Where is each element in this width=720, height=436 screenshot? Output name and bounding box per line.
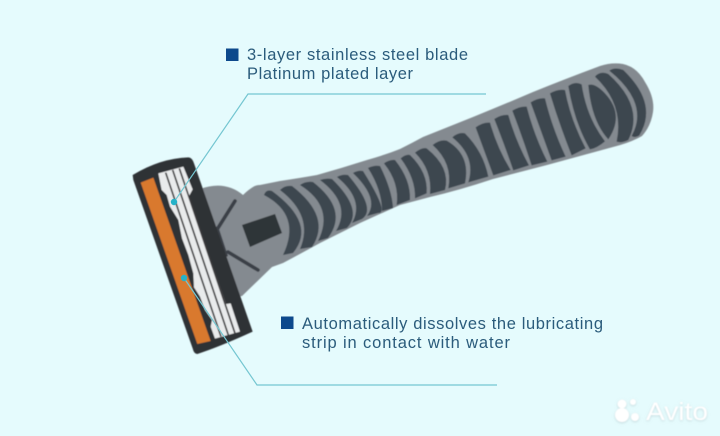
pivot struts and slot [206,201,282,270]
razor handle [200,63,653,300]
leader dot: blade [171,199,177,205]
leader dot: strip [181,275,187,281]
razor illustration [133,63,653,354]
blade description: Platinum plated layer [247,65,414,83]
watermark: Avito: Avito [646,398,708,426]
watermark: Avito [615,398,708,426]
bullet square [226,48,238,61]
blade description: 3-layer stainless steel blade [247,46,468,64]
cartridge frame [133,157,253,354]
strip description: strip in contact with water [302,334,510,352]
razor head [133,157,253,354]
callout text: blade [226,46,468,83]
callout: strip leader line [181,275,497,385]
blades [158,167,240,339]
lubricating strip [141,178,211,344]
callout text: strip [281,315,603,352]
strip description: Automatically dissolves the lubricating [302,315,603,333]
handle grip cells [264,68,646,255]
blade edges [166,168,235,337]
bullet square [281,316,294,329]
handle body and neck [200,63,653,300]
callout: blade leader line [171,94,486,205]
